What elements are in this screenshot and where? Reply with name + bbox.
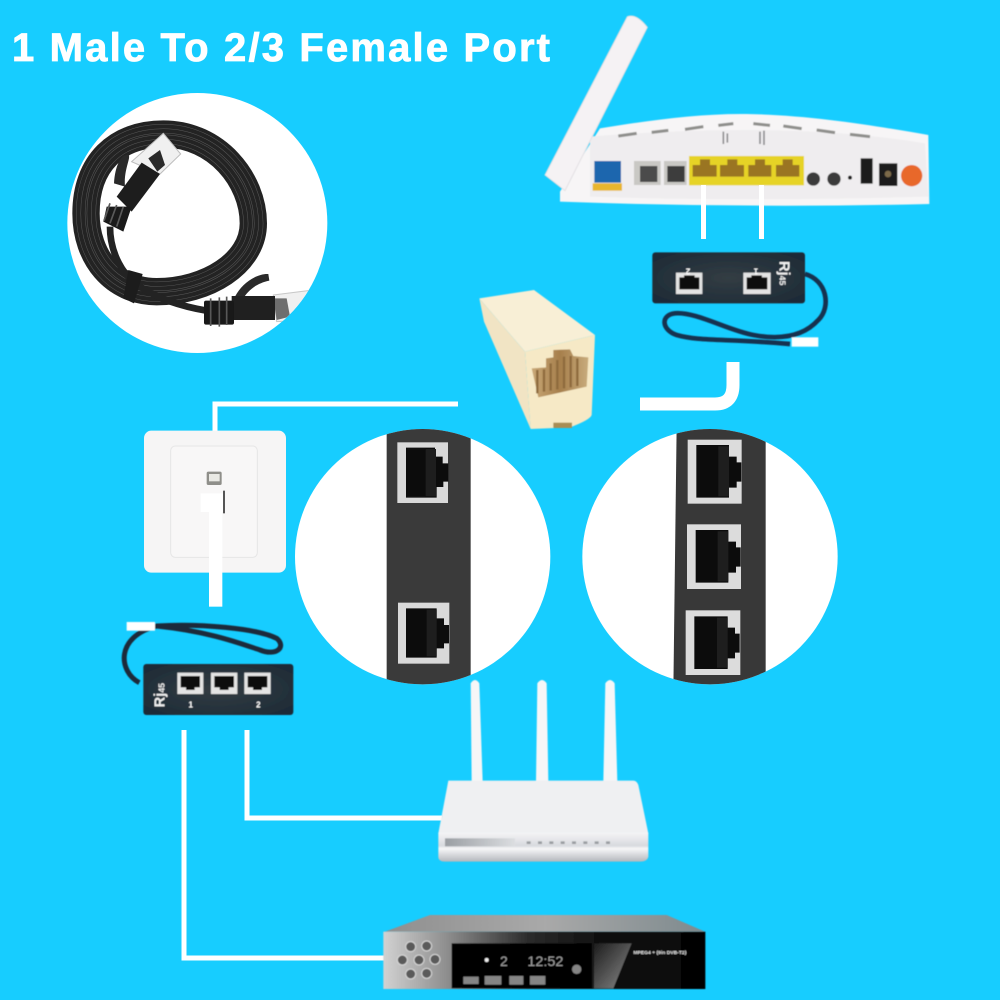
set-top box — [383, 915, 705, 989]
port 1 — [688, 440, 742, 504]
antennas — [471, 680, 617, 782]
coupler top face — [479, 290, 595, 352]
plug — [201, 493, 223, 512]
plug — [127, 622, 155, 631]
wire: splitter to wifi router — [247, 730, 442, 818]
grey ports — [634, 161, 687, 185]
coupler slot — [553, 423, 572, 428]
port 2 — [687, 524, 741, 589]
port 3 — [686, 610, 740, 675]
housing strip — [387, 425, 471, 692]
router body — [560, 114, 929, 206]
glossy panel — [594, 943, 632, 988]
cable tie — [123, 270, 143, 303]
RJ45 coupler — [479, 290, 595, 429]
panel: flat ethernet cable circle — [67, 93, 327, 353]
buttons and sockets — [807, 158, 922, 186]
display text — [485, 953, 564, 969]
wire: splitter to TV box — [184, 730, 386, 958]
two-port splitter (top) — [652, 252, 826, 347]
socket — [207, 472, 222, 485]
port numbers — [685, 267, 758, 276]
contacts — [537, 356, 577, 393]
wire: coupler to top splitter — [640, 362, 733, 404]
indicators — [527, 839, 610, 847]
port numbers: 1 — [753, 267, 758, 276]
top router (ONT) — [545, 16, 929, 206]
splitter lead — [124, 625, 281, 683]
box front — [383, 932, 705, 989]
port numbers: 2 — [256, 700, 261, 709]
model label: MPEG4 + (9in DVB-T2) — [633, 950, 687, 956]
cable coil — [86, 134, 253, 311]
splitter body — [143, 664, 293, 715]
wire: wall plate to coupler — [215, 404, 458, 432]
coupler jack — [532, 349, 588, 397]
status bar — [445, 838, 515, 846]
port lower — [398, 603, 449, 664]
warning labels — [593, 183, 622, 191]
title: 1 Male To 2/3 Female Port — [12, 26, 550, 70]
port 1 — [743, 273, 771, 294]
splitter body — [652, 252, 805, 303]
three-port splitter (bottom left) — [124, 622, 293, 715]
wifi router — [438, 680, 648, 862]
Rj45 logo: Rj45 — [152, 683, 168, 707]
port numbers — [188, 700, 261, 709]
coupler side face — [479, 298, 531, 429]
wall socket plate — [144, 431, 286, 607]
port upper — [397, 442, 448, 503]
port 2 — [676, 273, 702, 294]
fibre port — [594, 161, 621, 183]
antenna — [545, 16, 647, 191]
coupler front face — [525, 335, 595, 429]
wifi mark — [723, 131, 764, 145]
top vents — [618, 124, 870, 137]
display text: 12:52 — [527, 953, 564, 969]
panel: two-port closeup — [295, 425, 550, 692]
yellow LAN ports — [689, 156, 804, 185]
router top — [438, 781, 648, 833]
panel: three-port closeup — [582, 425, 838, 692]
display — [452, 943, 592, 988]
ports — [177, 673, 271, 694]
router wires — [701, 185, 764, 239]
housing strip — [673, 425, 766, 692]
plug — [792, 337, 818, 347]
button cluster — [397, 941, 440, 979]
format badges — [463, 965, 581, 985]
bottom connector — [204, 274, 313, 327]
display text: 2 — [500, 953, 508, 969]
box top — [385, 915, 705, 932]
router front — [438, 833, 648, 862]
cable — [209, 512, 222, 607]
splitter lead — [665, 274, 826, 344]
port numbers: 1 — [188, 700, 193, 709]
Rj45 logo: Rj 45 — [775, 261, 791, 285]
top connector — [103, 133, 181, 232]
port numbers: 2 — [685, 267, 690, 276]
